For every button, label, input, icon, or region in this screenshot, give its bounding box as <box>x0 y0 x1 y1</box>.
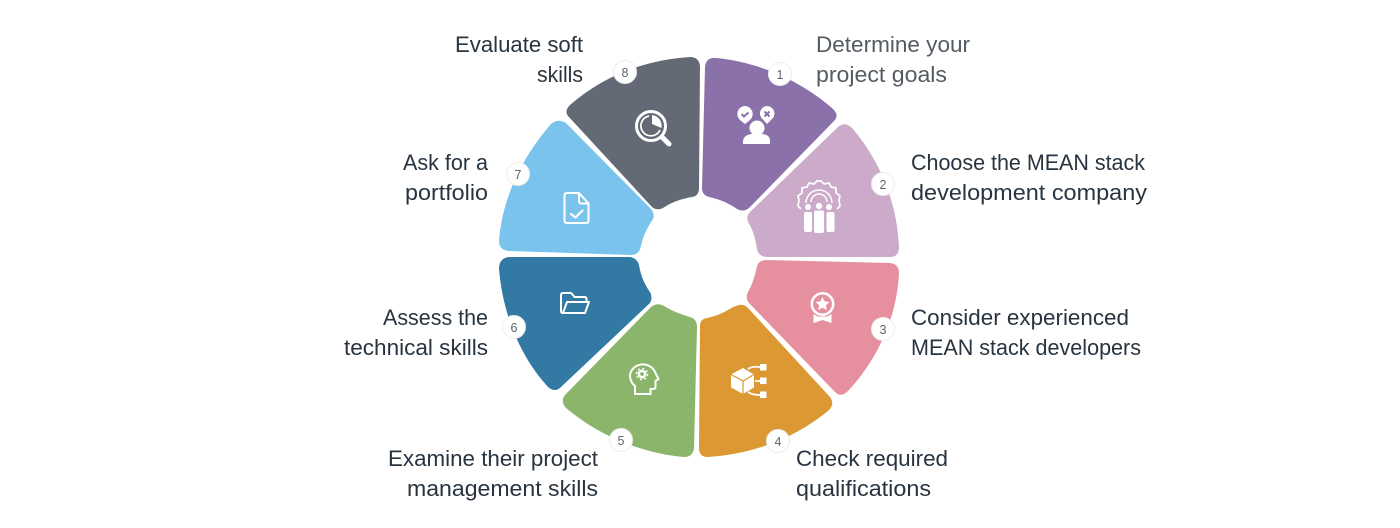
number badge 1 <box>768 62 792 86</box>
number badge 3: 3 <box>880 323 887 337</box>
segment 8: slate <box>566 57 700 209</box>
label 6: Assess the <box>383 305 488 330</box>
label 6: technical skills <box>344 335 488 360</box>
label 1: Determine your <box>816 32 970 57</box>
icon: open folder <box>561 293 589 313</box>
icon: head with gear <box>630 364 658 394</box>
number badge 5 <box>610 428 632 452</box>
number badge 2 <box>872 172 894 196</box>
icon: cube with nodes <box>731 364 766 398</box>
segment 6: blue <box>499 257 652 390</box>
number badge 4 <box>766 430 790 452</box>
number badge 1: 1 <box>777 68 784 82</box>
label 6 <box>344 305 488 360</box>
label 2: development company <box>911 180 1147 205</box>
segment 7: sky blue <box>499 121 654 255</box>
label 5: management skills <box>407 476 598 501</box>
number badge 6: 6 <box>511 321 518 335</box>
label 3: Consider experienced <box>911 305 1129 330</box>
label 4: Check required <box>796 446 948 471</box>
label 1 <box>816 32 970 87</box>
number badge 2: 2 <box>880 178 887 192</box>
number badge 7: 7 <box>515 168 522 182</box>
icon: document with check <box>564 193 588 223</box>
icon: gear with team <box>798 181 840 233</box>
segment 1: purple <box>702 58 837 211</box>
segment 3: rose <box>747 260 899 395</box>
label 5: Examine their project <box>388 446 598 471</box>
label 4: qualifications <box>796 476 931 501</box>
segment 5: green <box>563 304 697 457</box>
label 2: Choose the MEAN stack <box>911 150 1146 175</box>
label 8 <box>455 32 583 87</box>
icon: award badge <box>812 293 833 323</box>
label 3 <box>911 305 1141 360</box>
icon: person with check and cross <box>737 106 774 144</box>
number badge 8 <box>614 60 636 84</box>
label 7 <box>403 150 489 205</box>
label 3: MEAN stack developers <box>911 335 1141 360</box>
label 1: project goals <box>816 62 947 87</box>
label 7: Ask for a <box>403 150 489 175</box>
label 8: skills <box>537 62 583 87</box>
segment 2: lilac <box>747 124 899 257</box>
number badge 4: 4 <box>775 435 782 449</box>
label 7: portfolio <box>405 180 488 205</box>
number badge 8: 8 <box>622 66 629 80</box>
number badge 5: 5 <box>618 434 625 448</box>
number badge 6 <box>502 316 526 338</box>
number badge 7 <box>506 162 530 186</box>
label 8: Evaluate soft <box>455 32 583 57</box>
number badge 3 <box>872 318 894 340</box>
label 2 <box>911 150 1147 205</box>
segment 4: orange <box>699 305 832 457</box>
icon: magnifier with pie <box>636 112 669 144</box>
label 5 <box>388 446 598 501</box>
label 4 <box>796 446 948 501</box>
